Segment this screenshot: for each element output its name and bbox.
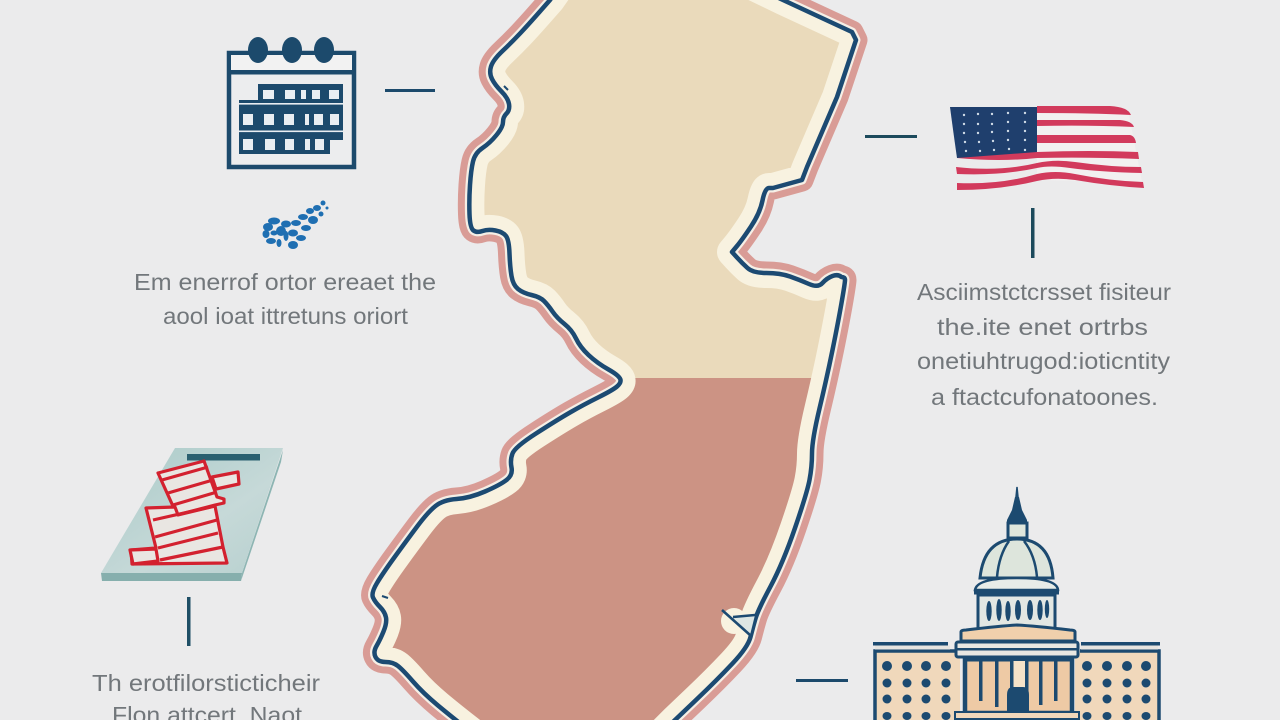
text block: right: onetiuhtrugod:ioticntity (917, 348, 1171, 374)
text block: right: Asciimstctcrsset fisiteur (917, 279, 1171, 305)
connector: calendar (385, 89, 435, 92)
dome (974, 487, 1059, 629)
left wing (873, 642, 960, 720)
portico (955, 625, 1079, 719)
text block: top left: aool ioat ittretuns oriort (163, 303, 409, 329)
icon: capitol building (873, 487, 1160, 720)
connector: capitol (796, 679, 848, 682)
icon: american flag (950, 106, 1144, 190)
connector: flag vertical (1031, 208, 1034, 258)
text block: right (917, 279, 1171, 410)
icon: blue check mark (262, 200, 328, 249)
icon: calendar (229, 37, 354, 167)
connector: ballot (187, 597, 190, 646)
text block: top left: Em enerrof ortor ereaet the (134, 269, 436, 295)
connector: flag horizontal (865, 135, 917, 138)
icon: ballot papers on tray (101, 448, 283, 581)
text block: bottom left: Th erotfilorsticticheir (92, 670, 320, 696)
text block: right: the.ite enet ortrbs (937, 314, 1148, 340)
text block: bottom left (92, 670, 320, 720)
text block: top left (134, 269, 436, 329)
text block: right: a ftactcufonatoones. (931, 384, 1158, 410)
right wing (1075, 642, 1160, 720)
map: state outline (340, 0, 880, 720)
